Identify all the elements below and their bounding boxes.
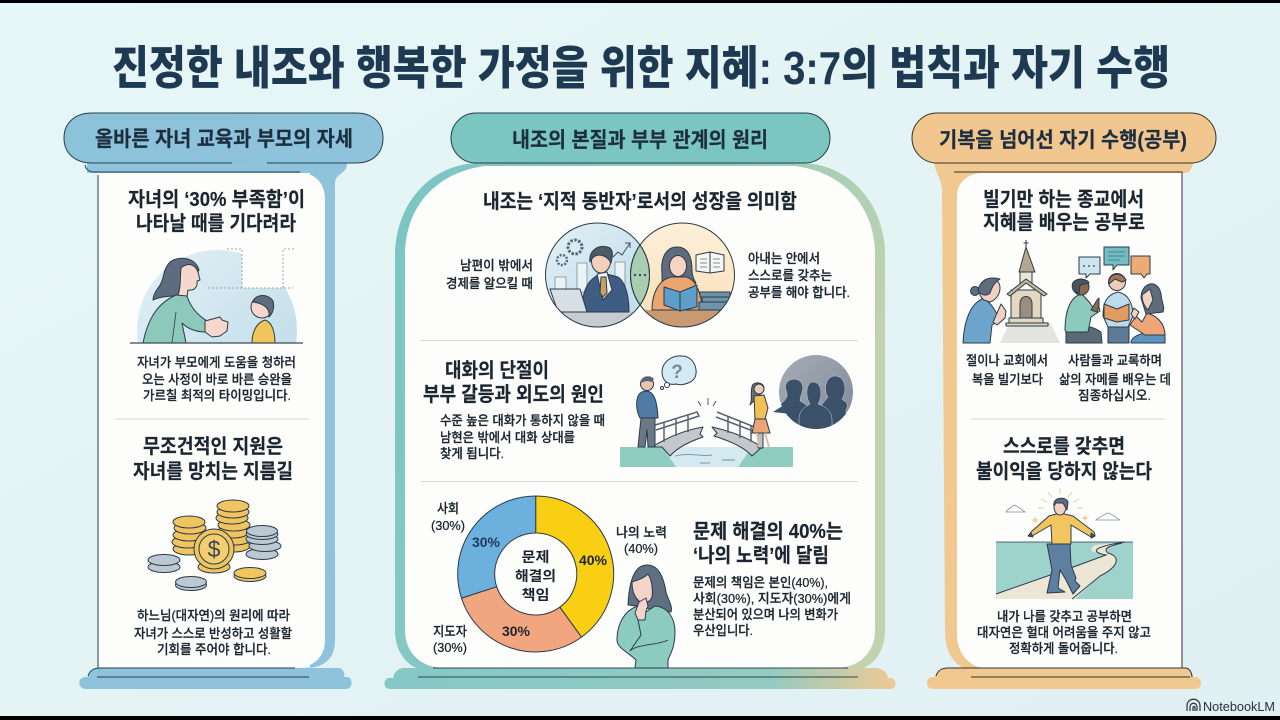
text: wife: 스스로를 갖추는 — [748, 268, 832, 283]
donut center label: 해결의 — [515, 568, 556, 584]
donut center label: 문제 — [522, 549, 550, 565]
right person — [1130, 284, 1165, 343]
panel: right pillar, self cultivation — [912, 113, 1216, 689]
speech bubbles — [1079, 247, 1150, 278]
text: nature helps: 대자연은 헐대 어려움을 주지 않고 — [977, 625, 1151, 640]
text: responsibility body: 문제의 책임은 본인(40%), — [693, 575, 828, 590]
illustration: praying woman and church — [963, 240, 1060, 343]
text: responsibility body — [693, 575, 851, 638]
heading: from praying to learning: 빌기만 하는 종교에서 — [983, 188, 1144, 211]
text: nature helps — [977, 609, 1151, 656]
heading: no harm when prepared: 스스로를 갖추면 — [1003, 435, 1125, 458]
illustration: broken bridge — [620, 355, 853, 467]
text: responsibility body: 우산입니다. — [693, 623, 753, 638]
center person — [1103, 274, 1133, 343]
illustration: mother and child — [130, 248, 303, 344]
donut center label: 책임 — [522, 587, 550, 603]
donut chart: responsibility: 30% — [472, 534, 501, 550]
text: conversation body: 수준 높은 대화가 통하지 않을 때 — [440, 413, 605, 428]
donut labels: (40%) — [624, 541, 658, 556]
text: natural principle: 하느님(대자연)의 원리에 따라 — [137, 608, 290, 623]
donut labels: (30%) — [433, 640, 467, 655]
thought bubble: ? — [671, 362, 683, 383]
text: conversation body — [440, 413, 605, 461]
illustration: wife circle — [640, 224, 734, 326]
thought bubble — [660, 356, 696, 390]
heading: from praying to learning: 지혜를 배우는 공부로 — [983, 211, 1145, 234]
text: natural principle: 자녀가 스스로 반성하고 성활할 — [134, 626, 292, 641]
man figure — [637, 376, 658, 447]
text: husband: 경제를 알으킬 때 — [446, 276, 533, 291]
text: learn wisdom: 삶의 자메를 배우는 데 — [1059, 372, 1171, 387]
venn overlap with dots — [630, 245, 650, 305]
text: conversation body: 남현은 밖에서 대화 상대를 — [440, 430, 575, 445]
donut labels — [431, 501, 667, 655]
text: wife: 공부를 해야 합니다. — [748, 285, 850, 300]
donut chart: responsibility — [458, 496, 614, 652]
panel: left pillar, parenting — [64, 113, 383, 689]
heading: broken conversation: 부부 갈등과 외도의 원인 — [423, 383, 604, 406]
arch frame and base — [384, 113, 896, 689]
text: instead of praying — [966, 353, 1048, 387]
text: best teaching timing: 자녀가 부모에게 도움을 청하러 — [137, 355, 296, 370]
capital heading: 내조의 본질과 부부 관계의 원리 — [512, 129, 768, 152]
pillar structure blue — [64, 113, 383, 689]
text: instead of praying: 절이나 교회에서 — [966, 353, 1048, 368]
left person — [1065, 279, 1102, 343]
donut labels: (30%) — [431, 518, 465, 533]
text: natural principle: 기회를 주어야 합니다. — [157, 642, 271, 657]
capital heading: 올바른 자녀 교육과 부모의 자세 — [95, 128, 353, 151]
illustration: people discussing book — [1065, 247, 1165, 343]
heading: broken conversation: 대화의 단절이 — [445, 359, 549, 382]
text: responsibility body: 분산되어 있으며 나의 변화가 — [693, 607, 838, 622]
text: husband: 남편이 밖에서 — [460, 258, 533, 273]
text: wife — [748, 251, 850, 300]
icon: dollar sign: $ — [208, 536, 221, 562]
pillar structure tan — [912, 113, 1216, 689]
text: best teaching timing: 가르칠 최적의 타이밍입니다. — [143, 388, 291, 403]
illustration: walking person on path — [996, 488, 1133, 599]
text: best teaching timing — [137, 355, 296, 403]
heading: intellectual companion: 내조는 ‘지적 동반자’로서의 성장을 의미함 — [483, 190, 797, 213]
heading: 40 percent — [693, 520, 843, 567]
text: nature helps: 정확하게 돌어줍니다. — [1009, 641, 1118, 656]
heading: wait for 30%: 자녀의 ‘30% 부족함’이 — [128, 188, 305, 211]
text: instead of praying: 복을 빌기보다 — [972, 372, 1043, 387]
heading: wait for 30%: 나타날 때를 기다려라 — [136, 212, 296, 235]
heading: broken conversation — [423, 359, 604, 406]
text: learn wisdom: 사람들과 교록하며 — [1068, 353, 1162, 368]
icon: coin stacks — [148, 500, 281, 590]
heading: 40 percent: 문제 해결의 40%는 — [693, 520, 843, 543]
donut labels: 사회 — [437, 501, 459, 516]
donut labels: 나의 노력 — [616, 525, 667, 540]
heading: unconditional support: 무조건적인 지원은 — [143, 435, 283, 458]
text: best teaching timing: 오는 사정이 바로 바른 승완을 — [142, 372, 292, 387]
text: responsibility body: 사회(30%), 지도자(30%)에게 — [693, 591, 851, 606]
text: wife: 아내는 안에서 — [748, 251, 820, 266]
heading: unconditional support: 자녀를 망치는 지름길 — [133, 460, 293, 483]
donut center label — [515, 549, 556, 603]
heading: unconditional support — [133, 435, 293, 483]
watermark: NotebookLM: NotebookLM — [1203, 699, 1275, 714]
text: learn wisdom: 짐종하십시오. — [1078, 388, 1151, 403]
illustration: husband circle — [546, 224, 640, 326]
donut chart: responsibility: 40% — [579, 552, 608, 568]
capital heading: 기복을 넘어선 자기 수행(공부) — [939, 129, 1187, 152]
heading: no harm when prepared: 불이익을 당하지 않는다 — [976, 460, 1152, 483]
text: learn wisdom — [1059, 353, 1171, 403]
illustration: thinking woman — [617, 565, 675, 668]
heading: wait for 30% — [128, 188, 305, 235]
panel: center arch, marital support — [384, 113, 896, 689]
donut labels: 지도자 — [433, 624, 467, 639]
heading: from praying to learning — [983, 188, 1145, 234]
donut chart: responsibility: 30% — [502, 623, 531, 639]
text: conversation body: 찾게 됩니다. — [440, 446, 504, 461]
woman figure — [750, 383, 770, 447]
text: nature helps: 내가 나를 갖추고 공부하면 — [997, 609, 1132, 624]
text: husband — [446, 258, 533, 291]
text: natural principle — [134, 608, 292, 657]
heading: no harm when prepared — [976, 435, 1152, 483]
heading: 40 percent: ‘나의 노력’에 달림 — [693, 544, 829, 567]
venn outlines — [546, 223, 734, 327]
speech bubble silhouettes — [773, 355, 853, 432]
